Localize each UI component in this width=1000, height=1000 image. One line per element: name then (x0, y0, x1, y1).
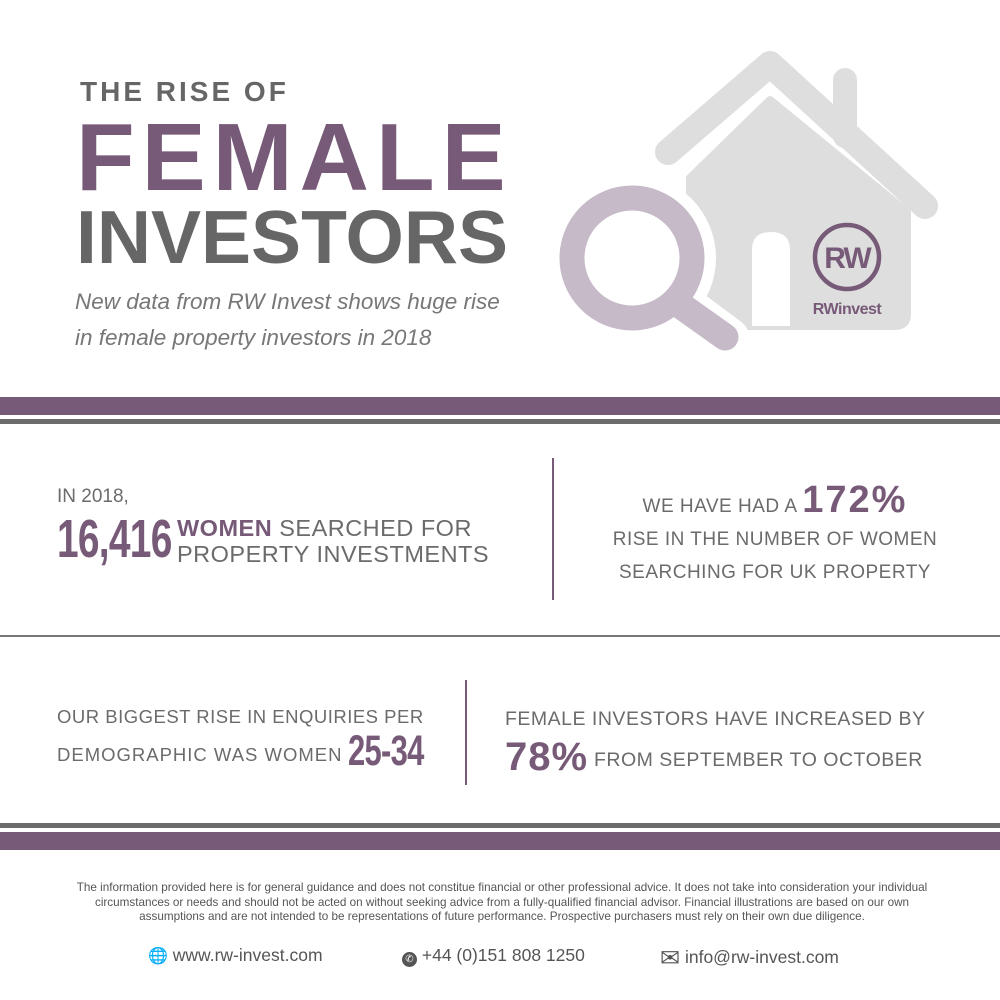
stat: 16,416 women: WOMEN SEARCHED FOR (177, 515, 472, 541)
stat: 25-34: OUR BIGGEST RISE IN ENQUIRIES PER (57, 706, 424, 727)
title: the rise of: THE RISE OF (80, 76, 289, 107)
stat: 16,416 women: IN 2018, (57, 486, 129, 507)
subtitle: New data from RW Invest shows huge rise (75, 289, 500, 314)
contact: web: 🌐 www.rw-invest.com (148, 945, 323, 965)
logo: RWinvest (813, 301, 882, 318)
logo (813, 225, 882, 318)
subtitle: in female property investors in 2018 (75, 325, 431, 350)
stat: 172% (613, 479, 937, 583)
contact: email: ✉ info@rw-invest.com (660, 945, 839, 972)
contact: phone: ✆ (405, 954, 414, 965)
stat: 172%: RISE IN THE NUMBER OF WOMEN (613, 529, 937, 550)
title: investors: INVESTORS (76, 195, 508, 279)
stat: 16,416 women (57, 486, 489, 569)
illustration: house with magnifier and logo (560, 51, 938, 350)
logo: RW (824, 242, 872, 275)
stat: 78% (505, 708, 925, 779)
stat: 172%: WE HAVE HAD A 172% (643, 479, 907, 521)
subtitle (75, 289, 500, 350)
contact: phone: +44 (0)151 808 1250 (422, 945, 585, 965)
stat: 16,416 women: PROPERTY INVESTMENTS (177, 541, 489, 567)
stat: 78%: FEMALE INVESTORS HAVE INCREASED BY (505, 708, 925, 730)
stat: 25-34: DEMOGRAPHIC WAS WOMEN (57, 744, 342, 765)
stat: 172%: SEARCHING FOR UK PROPERTY (619, 562, 931, 583)
stat: 25-34 (57, 706, 424, 775)
stat: 16,416 women: 16,416 (57, 509, 172, 569)
title: female: FEMALE (76, 104, 513, 211)
disclaimer: The information provided here is for general guidance and does not constitue financial or other professional advice. It does not take into consideration your individual circumstances or needs and should not be acted on without seeking advice from a fully-qualified financial advisor. Financial illustrations are based on our own assumptions and are not intended to be representations of future performance. Prospective purchasers must rely on their own due diligence. (77, 881, 927, 923)
stat: 25-34: 25-34 (348, 727, 424, 775)
stat: 78%: 78% FROM SEPTEMBER TO OCTOBER (505, 735, 923, 779)
